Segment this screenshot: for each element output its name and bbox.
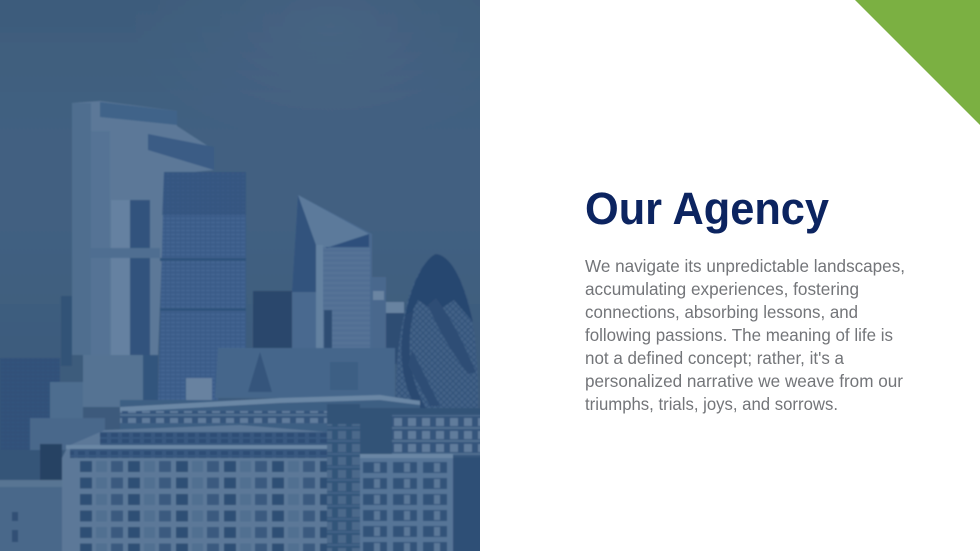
body text: following passions. The meaning of life is — [585, 325, 893, 345]
low dark office block — [253, 291, 292, 352]
body text: triumphs, trials, joys, and sorrows. — [585, 394, 838, 414]
body text: We navigate its unpredictable landscapes, — [585, 256, 905, 276]
left low-rise buildings — [0, 444, 62, 551]
body text: personalized narrative we weave from our — [585, 371, 903, 391]
body text: not a defined concept; rather, it's a — [585, 348, 844, 368]
skyscraper: curved pale tower — [72, 101, 214, 355]
photo panel: city skyline with blue overlay — [0, 0, 490, 551]
body text: accumulating experiences, fostering — [585, 279, 859, 299]
body text: connections, absorbing lessons, and — [585, 302, 858, 322]
foreground apartment building: centre — [120, 395, 420, 551]
blue tone overlay — [0, 100, 480, 551]
background towers — [61, 277, 404, 366]
skyscraper: dark glass block — [158, 172, 246, 400]
foreground apartment building: right block — [360, 408, 490, 551]
mid-ground buildings — [0, 348, 395, 450]
title: Our Agency — [585, 183, 829, 234]
sky — [0, 0, 480, 458]
body text — [585, 256, 905, 414]
corner triangle — [855, 0, 980, 125]
gherkin tower — [396, 254, 478, 408]
foreground apartment building: left block — [62, 425, 327, 551]
skyscraper: wedge tower — [292, 196, 372, 348]
